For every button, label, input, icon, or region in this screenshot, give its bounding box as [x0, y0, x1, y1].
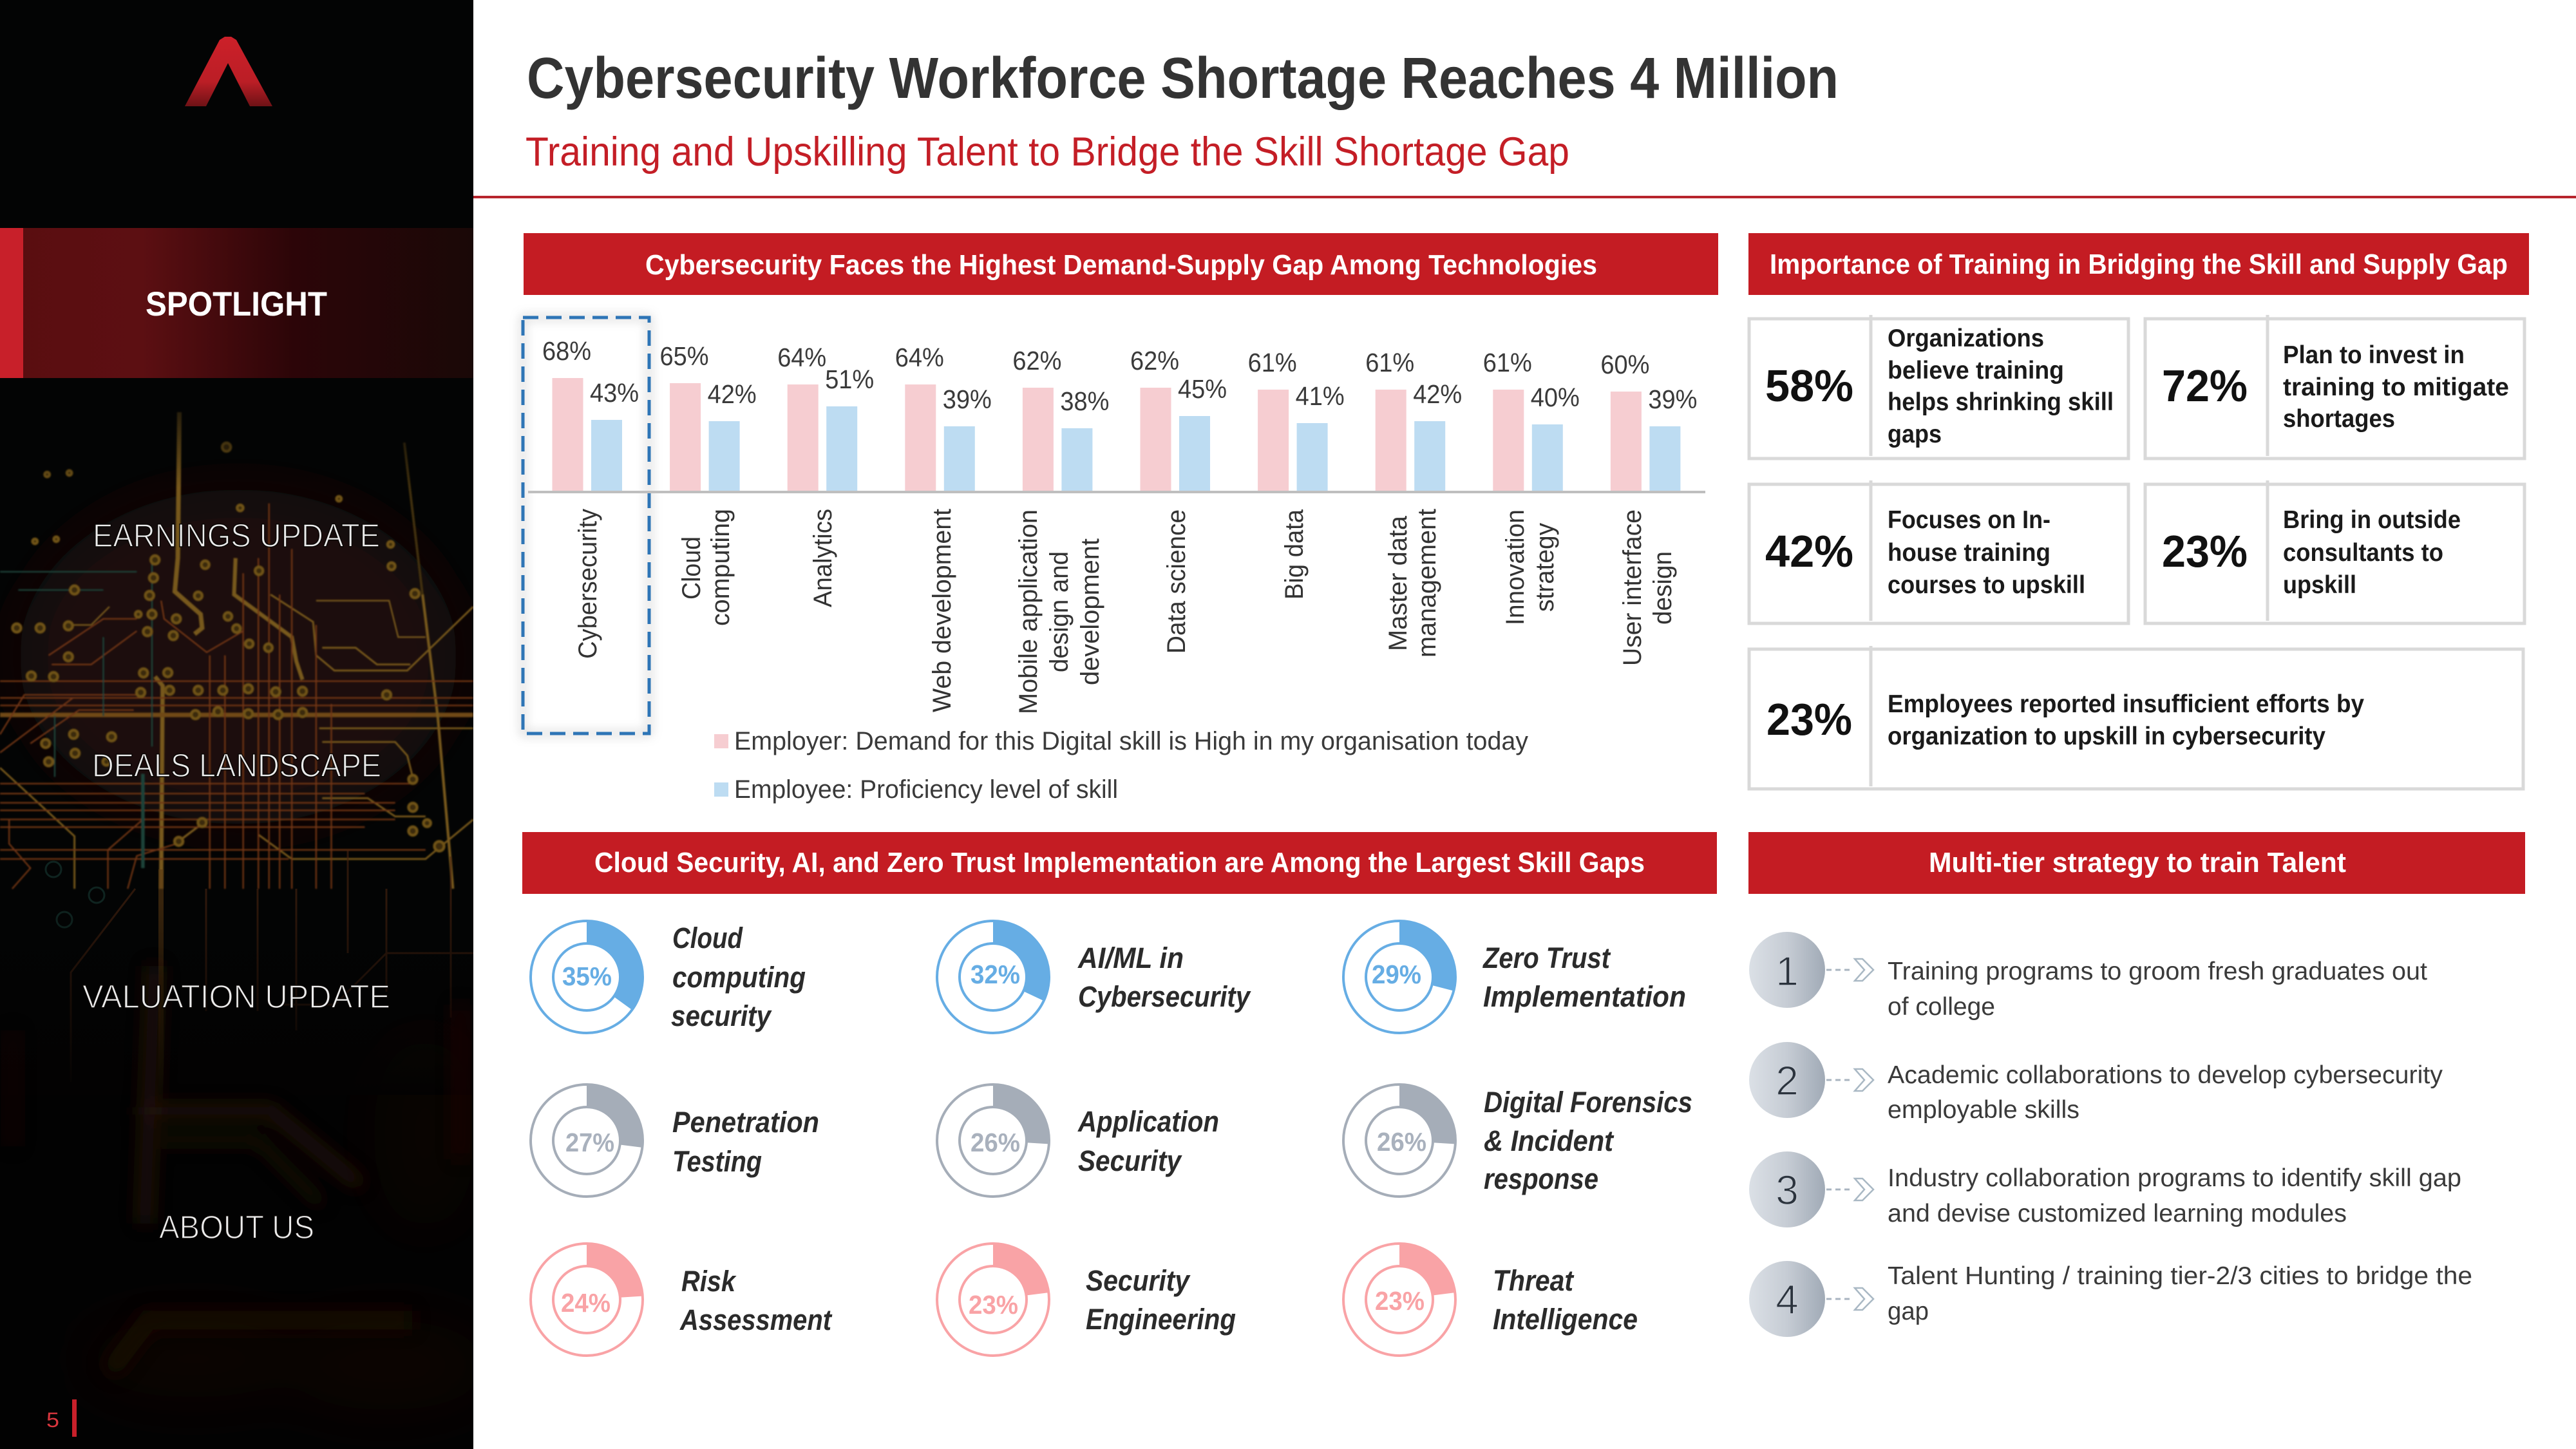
background: circuit board	[0, 412, 473, 1379]
donut: application security 26%	[937, 1084, 1219, 1197]
category labels: strategy	[1531, 523, 1559, 612]
step 1: of college	[1888, 993, 1995, 1021]
category labels: Analytics	[809, 509, 837, 607]
donut: security engineering 23%: Security	[1086, 1264, 1191, 1297]
step 2	[1749, 1042, 2443, 1124]
stat card: 42%: courses to upskill	[1888, 571, 2085, 599]
donut: application security 26%: Application	[1077, 1105, 1219, 1138]
category labels: User interface	[1618, 509, 1647, 666]
employer value labels: 62%	[1130, 346, 1179, 375]
employee proficiency bars	[591, 406, 1680, 491]
stat card: 58%	[1749, 315, 2128, 459]
nav item: about us: ABOUT US	[159, 1209, 314, 1245]
category labels: Master data	[1384, 515, 1412, 651]
donut: digital forensics 26%: Digital Forensics	[1484, 1086, 1692, 1119]
stat card: 58%: Organizations	[1888, 325, 2044, 352]
employee value labels: 51%	[825, 365, 874, 394]
arrow	[1826, 1288, 1873, 1310]
employee value labels: 45%	[1178, 374, 1227, 404]
donut: threat intelligence 23%	[1343, 1243, 1638, 1356]
category labels: Innovation	[1501, 509, 1530, 625]
donut: risk assessment 24%: Assessment	[679, 1303, 833, 1336]
header rule	[473, 196, 2576, 198]
employee value labels: 40%	[1531, 383, 1580, 412]
donut: penetration testing 27%: Testing	[672, 1145, 762, 1178]
highlight box: cybersecurity	[523, 317, 649, 734]
stat card: 58%: helps shrinking skill	[1888, 388, 2114, 416]
employee value labels: 43%	[590, 378, 639, 408]
nav item: deals landscape: DEALS LANDSCAPE	[92, 747, 381, 784]
step 2: Academic collaborations to develop cybersecurity	[1888, 1061, 2443, 1089]
logo	[185, 37, 272, 106]
subtitle: Training and Upskilling Talent to Bridge the Skill Shortage Gap	[526, 129, 1569, 175]
employer value labels: 68%	[542, 336, 591, 366]
step 4	[1749, 1261, 2472, 1337]
employer value labels: 64%	[895, 343, 944, 372]
step 4: 4	[1776, 1276, 1799, 1323]
heading: Cloud Security, AI, and Zero Trust Implementation are Among the Largest Skill Gaps	[594, 847, 1645, 878]
step 3: Industry collaboration programs to identify skill gap	[1888, 1164, 2461, 1192]
stat card: 72%	[2145, 315, 2524, 459]
employee value labels	[590, 365, 1697, 416]
donut: zero trust implementation 29%: Implementation	[1483, 980, 1686, 1013]
step 4: gap	[1888, 1298, 1929, 1325]
donut: cloud computing security 35%: security	[671, 999, 772, 1032]
employer value labels: 65%	[659, 341, 708, 371]
donut: threat intelligence 23%: Intelligence	[1493, 1303, 1638, 1336]
donut: security engineering 23%: Engineering	[1086, 1303, 1236, 1336]
heading: Importance of Training in Bridging the Skill and Supply Gap	[1770, 249, 2508, 280]
employee value labels: 42%	[1413, 379, 1462, 409]
heading	[522, 832, 1717, 894]
stat card: 23% consultants: 23%	[2162, 526, 2248, 576]
category labels	[574, 509, 1677, 714]
stat card: 72%: training to mitigate	[2283, 374, 2509, 401]
donut: security engineering 23%	[937, 1243, 1236, 1356]
donut: risk assessment 24%: 24%	[561, 1288, 611, 1318]
panel: importance of training	[1748, 233, 2529, 789]
step 4: Talent Hunting / training tier-2/3 cities to bridge the	[1888, 1262, 2472, 1290]
donut: cloud computing security 35%: computing	[672, 961, 806, 994]
stat card: 23% consultants: upskill	[2283, 571, 2356, 599]
donut: digital forensics 26%	[1343, 1084, 1692, 1197]
step 2: 2	[1776, 1057, 1799, 1104]
donut: zero trust implementation 29%: Zero Trust	[1482, 942, 1611, 974]
stat card: 42%: Focuses on In-	[1888, 506, 2050, 534]
arrow	[1826, 1069, 1873, 1091]
donut: application security 26%: 26%	[971, 1128, 1020, 1157]
donut: application security 26%: Security	[1078, 1144, 1182, 1177]
step 1: 1	[1776, 948, 1799, 994]
panel: demand-supply gap chart	[523, 233, 1718, 804]
donut: threat intelligence 23%: Threat	[1493, 1264, 1575, 1297]
legend: Employee: Proficiency level of skill	[734, 775, 1118, 804]
donut: digital forensics 26%: 26%	[1377, 1127, 1426, 1157]
donut: digital forensics 26%: response	[1484, 1162, 1598, 1195]
stat card: 23% employees	[1749, 646, 2523, 789]
heading: Cybersecurity Faces the Highest Demand-Supply Gap Among Technologies	[645, 249, 1597, 281]
employee value labels: 38%	[1060, 386, 1109, 416]
donut: AI/ML in cybersecurity 32%	[937, 920, 1251, 1033]
step 3: and devise customized learning modules	[1888, 1200, 2347, 1227]
donut: cloud computing security 35%: Cloud	[672, 922, 743, 954]
stat card: 23% employees: Employees reported insufficient efforts by	[1888, 690, 2364, 718]
stat card: 23% employees: 23%	[1766, 694, 1852, 744]
employer value labels: 64%	[777, 343, 826, 372]
donut: zero trust implementation 29%: 29%	[1372, 960, 1421, 989]
nav item: earnings update: EARNINGS UPDATE	[93, 517, 380, 554]
category labels: design and	[1045, 551, 1074, 672]
donut: security engineering 23%: 23%	[969, 1290, 1018, 1320]
panel: largest skill gaps	[522, 832, 1717, 1356]
active nav item: spotlight	[0, 228, 473, 378]
stat card: 58%: gaps	[1888, 421, 1942, 448]
donut: cloud computing security 35%: 35%	[562, 961, 612, 991]
employee value labels: 39%	[1648, 384, 1697, 414]
stat card: 58%: believe training	[1888, 357, 2064, 384]
stat card: 72%: Plan to invest in	[2283, 341, 2465, 369]
category labels: design	[1649, 551, 1677, 625]
stat card: 72%: 72%	[2162, 361, 2248, 411]
employee value labels: 41%	[1296, 381, 1345, 411]
category labels: Data science	[1162, 509, 1191, 654]
legend: Employer: Demand for this Digital skill is High in my organisation today	[734, 727, 1528, 755]
employer value labels: 61%	[1483, 348, 1532, 377]
category labels: computing	[706, 509, 735, 626]
donut: AI/ML in cybersecurity 32%: AI/ML in	[1077, 942, 1184, 974]
title: Cybersecurity Workforce Shortage Reaches 4 Million	[527, 46, 1839, 111]
employer value labels	[542, 336, 1649, 379]
heading: Multi-tier strategy to train Talent	[1929, 847, 2346, 878]
category labels: development	[1076, 538, 1104, 685]
page number	[46, 1399, 77, 1437]
nav item: valuation update: VALUATION UPDATE	[82, 978, 390, 1015]
stat card: 58%: 58%	[1765, 361, 1853, 411]
donut: digital forensics 26%: & Incident	[1484, 1124, 1615, 1157]
bar chart	[528, 336, 1705, 714]
donut: threat intelligence 23%: 23%	[1375, 1286, 1425, 1316]
step 3	[1749, 1151, 2461, 1227]
stat card: 42%: 42%	[1765, 526, 1853, 576]
donut: AI/ML in cybersecurity 32%: 32%	[971, 960, 1020, 989]
arrow	[1826, 959, 1873, 981]
panel: multi-tier strategy	[1748, 832, 2525, 1337]
stat card: 72%: shortages	[2283, 405, 2395, 433]
employer value labels: 61%	[1248, 348, 1297, 377]
category labels: Web development	[928, 509, 956, 712]
stat card: 42%	[1749, 480, 2128, 623]
heading	[1748, 233, 2529, 295]
active nav item: spotlight: SPOTLIGHT	[146, 285, 327, 323]
donut: zero trust implementation 29%	[1343, 920, 1686, 1033]
donut: penetration testing 27%: 27%	[565, 1128, 614, 1157]
stat card: 23% consultants: consultants to	[2283, 539, 2443, 567]
category labels: management	[1413, 509, 1441, 658]
employee value labels: 42%	[708, 379, 757, 409]
arrow	[1826, 1179, 1873, 1200]
donut: cloud computing security 35%	[531, 920, 806, 1033]
heading	[1748, 832, 2525, 894]
step 1	[1749, 932, 2427, 1021]
stat card: 23% consultants	[2145, 480, 2524, 623]
category labels: Mobile application	[1014, 509, 1043, 714]
page number: 5	[46, 1408, 59, 1432]
heading	[524, 233, 1718, 295]
employer value labels: 60%	[1600, 350, 1649, 379]
category labels: Big data	[1280, 509, 1309, 600]
donut: AI/ML in cybersecurity 32%: Cybersecurity	[1078, 980, 1251, 1013]
donut: risk assessment 24%	[531, 1243, 833, 1356]
donut: penetration testing 27%	[531, 1084, 819, 1197]
step 1: Training programs to groom fresh graduates out	[1888, 958, 2427, 985]
donut: penetration testing 27%: Penetration	[672, 1106, 819, 1139]
legend	[714, 727, 1528, 804]
category labels: Cybersecurity	[574, 509, 602, 659]
sidebar	[0, 0, 489, 1449]
donut: risk assessment 24%: Risk	[681, 1265, 737, 1298]
employer value labels: 61%	[1365, 348, 1414, 377]
employer value labels: 62%	[1012, 346, 1061, 375]
stat card: 23% employees: organization to upskill in cybersecurity	[1888, 723, 2325, 750]
category labels: Cloud	[677, 536, 706, 600]
employer demand bars	[553, 378, 1642, 491]
stat card: 23% consultants: Bring in outside	[2283, 506, 2461, 534]
employee value labels: 39%	[943, 384, 992, 414]
step 2: employable skills	[1888, 1096, 2079, 1124]
stat card: 42%: house training	[1888, 539, 2050, 567]
step 3: 3	[1776, 1167, 1799, 1213]
